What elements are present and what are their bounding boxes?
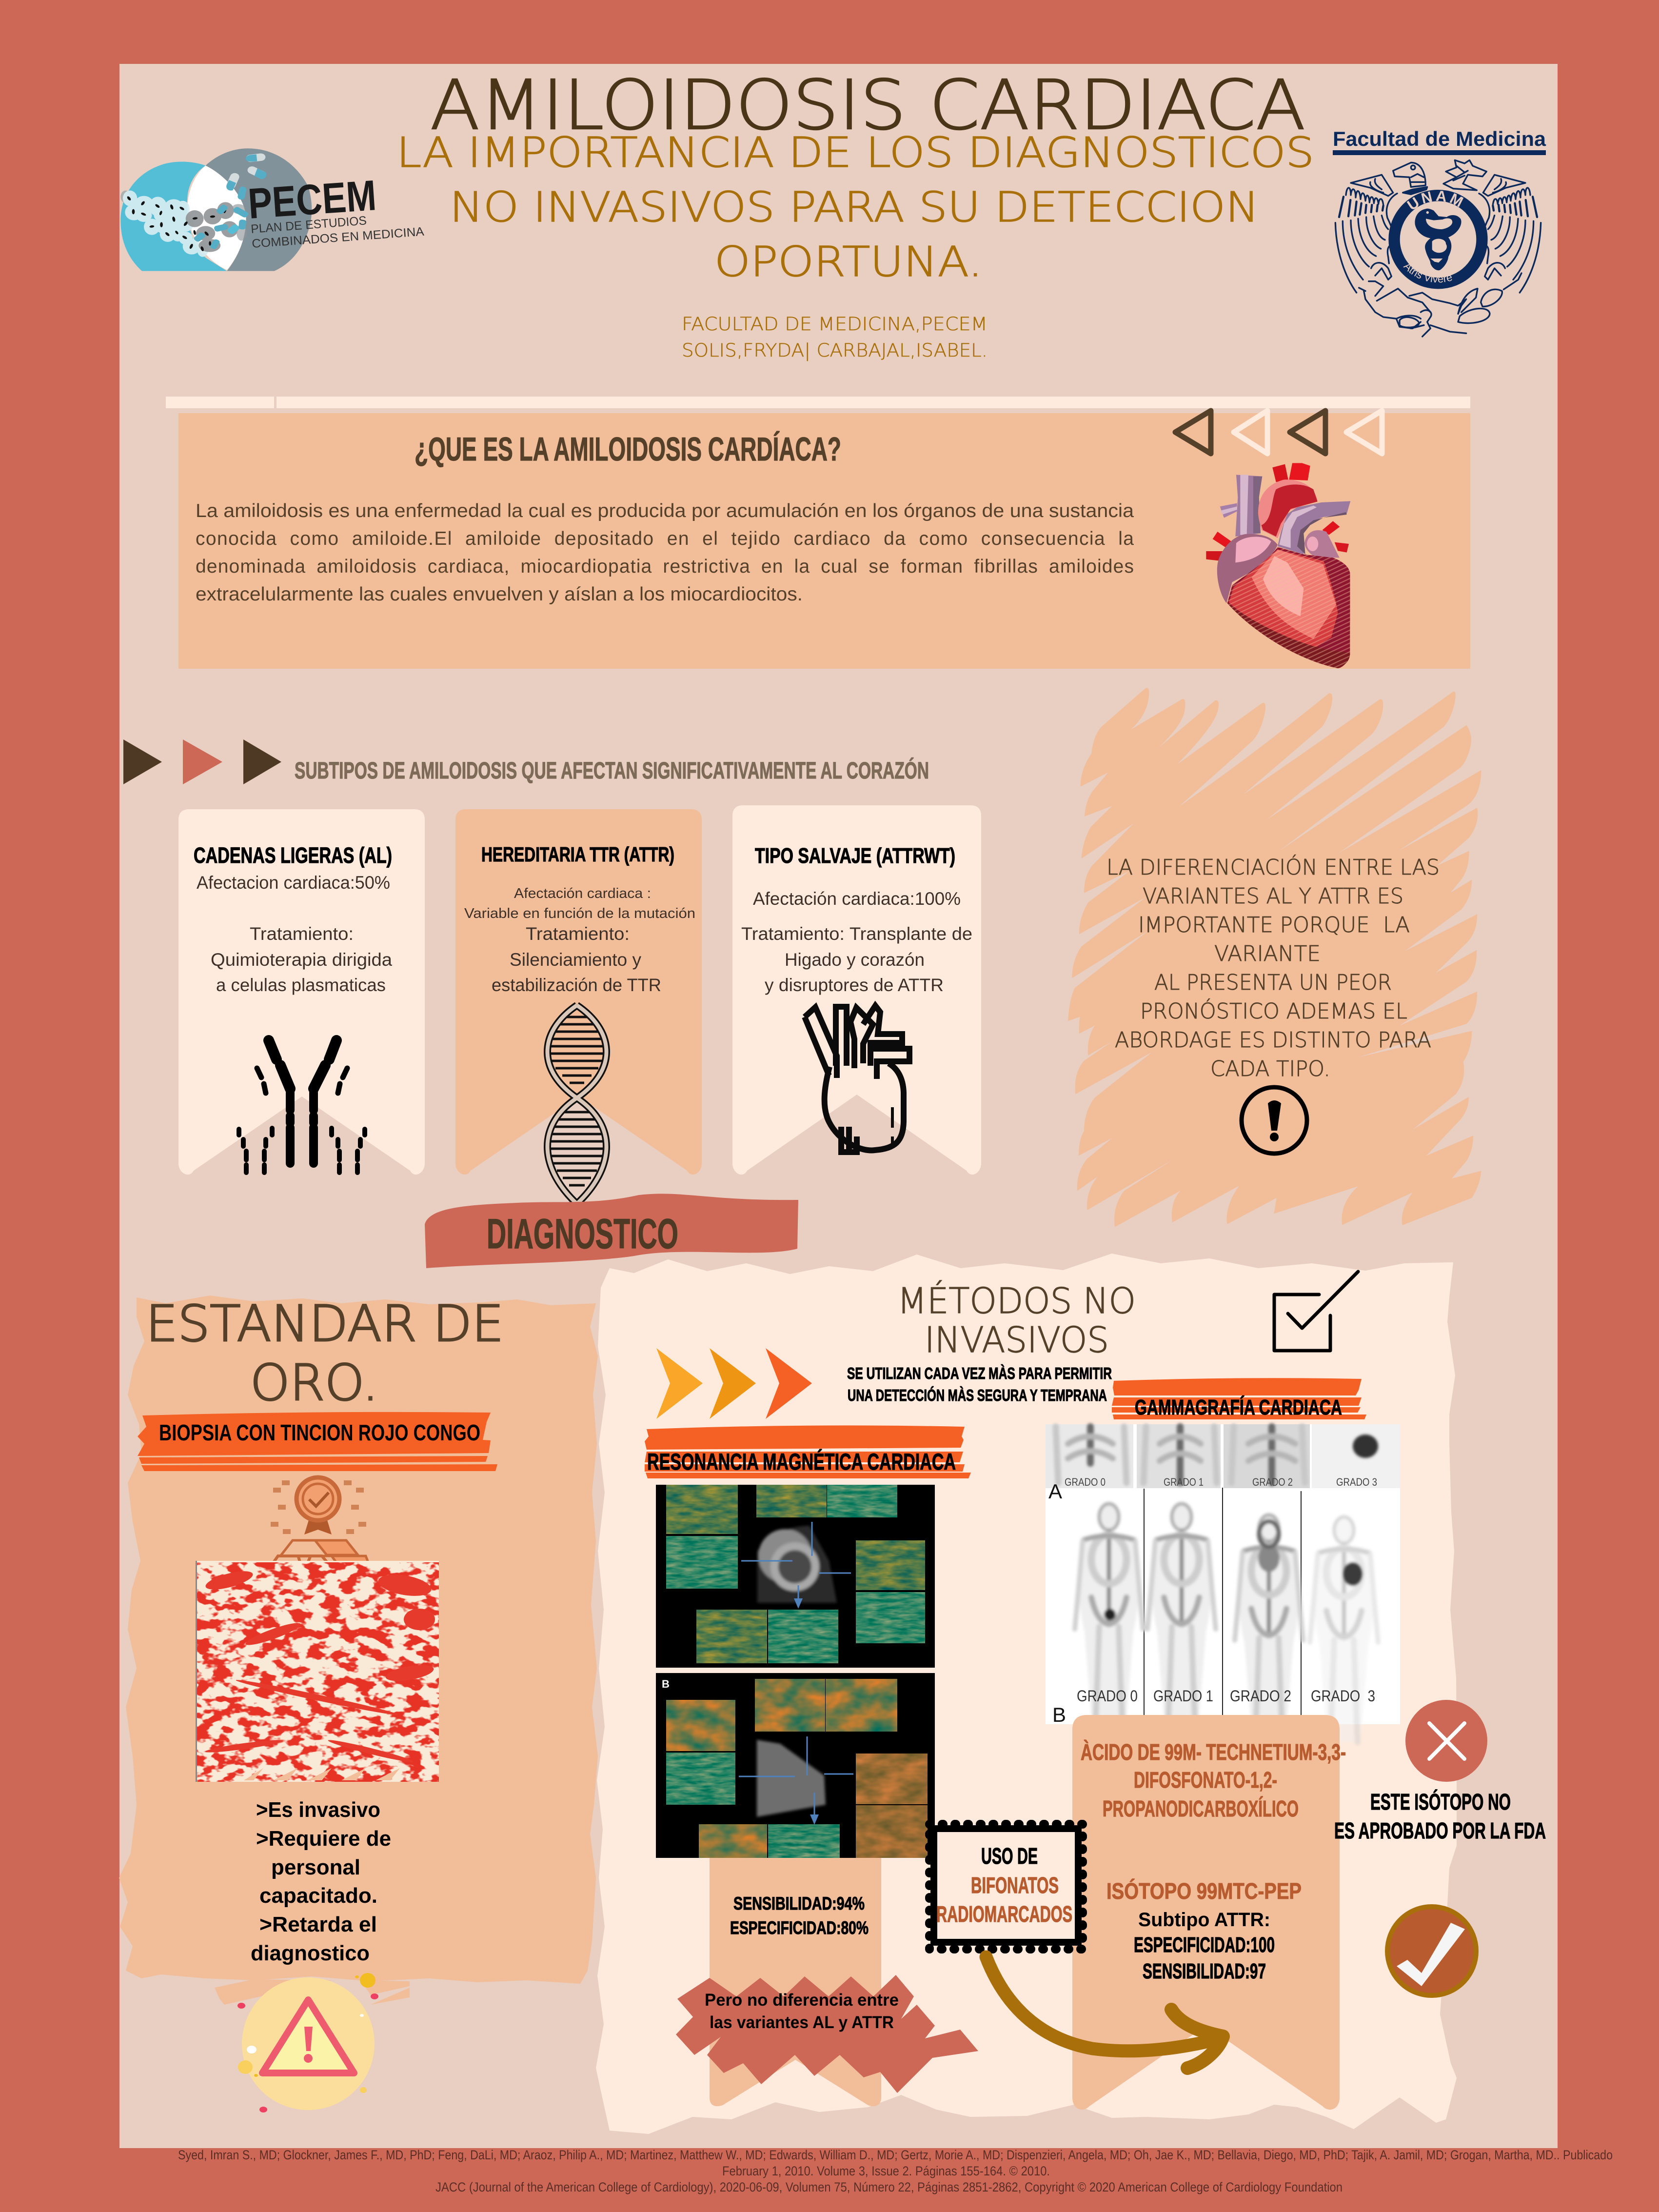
card text: a celulas plasmaticas	[216, 975, 386, 995]
card text: Quimioterapia dirigida	[211, 950, 392, 970]
text: desventajas biopsia: diagnostico	[251, 1941, 370, 1965]
text: metodos intro: SE UTILIZAN CADA VEZ MÀS PARA PERMITIR	[847, 1364, 1112, 1382]
crest	[1334, 159, 1542, 338]
banner: diagnostico	[425, 1194, 798, 1268]
icon: check circle	[1387, 1907, 1476, 1995]
brush label: gammagrafia	[1112, 1378, 1366, 1419]
scan labels A	[1048, 1476, 1377, 1503]
box: uso de bifonatos: BIFONATOS	[971, 1873, 1059, 1898]
note text: ABORDAGE ES DISTINTO PARA	[1115, 1028, 1431, 1053]
arrows: orange chevrons	[656, 1348, 812, 1419]
crest: Atris Vivere	[1403, 264, 1452, 283]
image: resonancia A	[656, 1485, 935, 1668]
image: congo red biopsy	[196, 1561, 439, 1782]
subtitle line 1: LA IMPORTANCIA DE LOS DIAGNOSTICOS	[396, 129, 1314, 177]
bookmark: isotopos	[1072, 1715, 1346, 2110]
image: gammagrafia	[1046, 1424, 1400, 1742]
brush label: biopsia: BIOPSIA CON TINCION ROJO CONGO	[159, 1420, 480, 1445]
scan labels A: GRADO 3	[1336, 1476, 1377, 1488]
chest scans	[1046, 1424, 1400, 1488]
icon: DNA helix	[545, 1005, 609, 1204]
bookmark: sensibilidad resonancia: ESPECIFICIDAD:80%	[730, 1918, 869, 1938]
scan labels A: A	[1048, 1480, 1062, 1503]
scan labels B: GRADO 3	[1311, 1687, 1375, 1705]
card text: Afectación cardiaca :	[514, 886, 651, 901]
box: uso de bifonatos: USO DE	[981, 1843, 1038, 1869]
brush label: biopsia	[138, 1412, 497, 1471]
card text: Silenciamiento y	[510, 950, 642, 970]
isotope name: ÀCIDO DE 99M- TECHNETIUM-3,3-	[1081, 1739, 1346, 1765]
references: JACC (Journal of the American College of Cardiology), 2020-06-09, Volumen 75, Número 22, Páginas 2851-2862, Copyright © 2020 American College of Cardiology Foundation	[435, 2180, 1343, 2194]
logo subtitle 1: PLAN DE ESTUDIOS	[250, 214, 367, 236]
panel: estandar de oro	[119, 1295, 598, 2005]
card text	[464, 886, 695, 995]
isotope name	[1081, 1739, 1346, 1904]
text: desventajas biopsia: personal	[271, 1855, 360, 1879]
card text: Variable en función de la mutación	[464, 906, 695, 921]
arrow 2	[183, 739, 222, 784]
heading: ¿QUE ES LA AMILOIDOSIS CARDÍACA?	[415, 431, 841, 468]
icon: medal and gold bars	[266, 1477, 373, 1574]
body text	[196, 500, 1134, 605]
heading line 2: ORO.	[250, 1354, 378, 1412]
panel: metodos no invasivos	[596, 1254, 1457, 2134]
panel: diferencia entre variantes (scribble)	[1068, 688, 1481, 1227]
scan labels B: B	[1052, 1703, 1066, 1726]
heading: metodos no invasivos: MÉTODOS NO	[897, 1280, 1136, 1321]
text: desventajas biopsia: >Es invasivo	[256, 1798, 380, 1822]
text: metodos intro	[847, 1364, 1112, 1404]
body text: denominada amiloidosis cardiaca, miocardiopatia restrictiva en la cual se forman fibrillas amiloides	[196, 556, 1134, 577]
card text: Tratamiento:	[250, 924, 354, 944]
logo wordmark: PECEM	[247, 171, 378, 228]
card title: TIPO SALVAJE (ATTRWT)	[755, 844, 955, 868]
subtype stats: Subtipo ATTR:	[1138, 1909, 1270, 1931]
decorative triangles	[1175, 411, 1382, 454]
note text: LA DIFERENCIACIÓN ENTRE LAS	[1106, 854, 1440, 880]
logo: PECEM	[120, 148, 425, 271]
image: resonancia B	[656, 1673, 935, 1858]
icon: exclamation	[1242, 1087, 1307, 1154]
brush note: no diferencia: las variantes AL y ATTR	[710, 2013, 894, 2032]
card text: Tratamiento:	[526, 924, 630, 944]
scan labels B: GRADO 1	[1153, 1687, 1213, 1705]
text: desventajas biopsia: capacitado.	[259, 1884, 377, 1908]
scan labels B: GRADO 0	[1077, 1687, 1138, 1705]
heading: metodos no invasivos	[897, 1280, 1136, 1360]
card text: Afectación cardiaca:100%	[753, 889, 961, 909]
card text: estabilización de TTR	[492, 975, 661, 995]
card: tipo salvaje	[732, 805, 981, 1175]
scan labels A: GRADO 2	[1252, 1476, 1293, 1488]
card text: y disruptores de ATTR	[765, 975, 944, 995]
card text: Afectacion cardiaca:50%	[197, 873, 390, 893]
text: desventajas biopsia: >Requiere de	[256, 1827, 391, 1851]
isotope name: PROPANODICARBOXÍLICO	[1103, 1796, 1299, 1821]
panel: que es la amiloidosis	[178, 413, 1470, 669]
icon: warning	[237, 1973, 378, 2112]
bookmark: sensibilidad resonancia	[710, 1844, 881, 2106]
body text: conocida como amiloide.El amiloide depositado en el tejido cardiaco da como consecuencia la	[196, 528, 1134, 549]
subtitle line 2: NO INVASIVOS PARA SU DETECCION	[450, 183, 1259, 232]
text: desventajas biopsia	[251, 1798, 391, 1965]
note: no aprobado FDA	[1334, 1789, 1546, 1843]
subtype stats: ESPECIFICIDAD:100	[1134, 1933, 1275, 1957]
text: desventajas biopsia: >Retarda el	[259, 1913, 377, 1936]
subtitle line 3: OPORTUNA.	[714, 238, 983, 286]
references: February 1, 2010. Volume 3, Issue 2. Páginas 155-164. © 2010.	[722, 2164, 1050, 2178]
subtype stats	[1134, 1909, 1275, 1983]
banner text: DIAGNOSTICO	[487, 1211, 678, 1257]
note text: VARIANTE	[1214, 941, 1321, 966]
section header: subtipos	[123, 739, 929, 784]
note text: CADA TIPO.	[1210, 1056, 1330, 1081]
whole-body scans	[1075, 1504, 1378, 1742]
heading: ESTANDAR DE	[146, 1295, 504, 1353]
note text: AL PRESENTA UN PEOR	[1154, 970, 1392, 995]
scan labels A: GRADO 0	[1065, 1476, 1106, 1488]
note: no aprobado FDA: ES APROBADO POR LA FDA	[1334, 1818, 1546, 1843]
title: AMILOIDOSIS CARDIACA	[430, 66, 1305, 145]
isotope name: ISÓTOPO 99MTC-PEP	[1106, 1878, 1302, 1904]
card title: HEREDITARIA TTR (ATTR)	[481, 843, 674, 866]
card: cadenas ligeras	[178, 809, 425, 1175]
section heading: SUBTIPOS DE AMILOIDOSIS QUE AFECTAN SIGNIFICATIVAMENTE AL CORAZÓN	[295, 757, 929, 784]
card text	[741, 889, 972, 995]
logo title: Facultad de Medicina	[1333, 127, 1546, 150]
scan labels A: GRADO 1	[1164, 1476, 1204, 1488]
scan labels B: GRADO 2	[1230, 1687, 1291, 1705]
icon: anatomical heart	[1206, 463, 1350, 668]
card text: Higado y corazón	[785, 950, 925, 970]
icon: heart outline	[805, 1006, 909, 1152]
arrow: bifonatos to isotope	[986, 1957, 1223, 2068]
card text: Tratamiento: Transplante de	[741, 924, 972, 944]
references	[178, 2148, 1613, 2194]
brush label: resonancia	[645, 1425, 971, 1478]
note text: IMPORTANTE PORQUE LA	[1138, 913, 1410, 937]
band: top cream strip	[166, 397, 1470, 408]
note text	[1106, 854, 1440, 1081]
box: uso de bifonatos: RADIOMARCADOS	[936, 1901, 1072, 1927]
logo subtitle 2: COMBINADOS EN MEDICINA	[251, 225, 425, 251]
subtype stats: SENSIBILIDAD:97	[1143, 1959, 1266, 1983]
scan labels B	[1052, 1687, 1375, 1726]
card title: CADENAS LIGERAS (AL)	[194, 843, 392, 868]
brush label: resonancia: RESONANCIA MAGNÉTICA CARDIACA	[647, 1449, 956, 1475]
body text: extracelularmente las cuales envuelven y aíslan a los miocardiocitos.	[196, 584, 803, 605]
isotope name: DIFOSFONATO-1,2-	[1134, 1767, 1277, 1793]
box: uso de bifonatos	[929, 1824, 1083, 1949]
affiliation: FACULTAD DE MEDICINA,PECEM	[682, 314, 988, 335]
icon: checkbox	[1274, 1272, 1358, 1351]
header: title block	[396, 66, 1314, 361]
image: resonancia B: B	[662, 1678, 670, 1690]
arrow 3	[243, 739, 281, 784]
body text: La amiloidosis es una enfermedad la cual es producida por acumulación en los órganos de una sustancia	[196, 500, 1134, 521]
brush note: no diferencia: Pero no diferencia entre	[705, 1991, 899, 2010]
text: metodos intro: UNA DETECCIÓN MÀS SEGURA Y TEMPRANA	[848, 1386, 1107, 1404]
card text	[197, 873, 392, 995]
brush note: no diferencia	[676, 1975, 978, 2093]
brush label: gammagrafia: GAMMAGRAFÍA CARDIACA	[1135, 1395, 1342, 1419]
card: hereditaria	[455, 809, 702, 1204]
note text: PRONÓSTICO ADEMAS EL	[1140, 998, 1407, 1024]
icon: X circle	[1405, 1700, 1487, 1782]
note text: VARIANTES AL Y ATTR ES	[1143, 884, 1403, 909]
crest: UNAM	[1406, 191, 1464, 209]
logo: Facultad de Medicina	[1333, 127, 1546, 338]
authors: SOLIS,FRYDA| CARBAJAL,ISABEL.	[682, 340, 988, 361]
heading: metodos no invasivos: INVASIVOS	[925, 1319, 1109, 1360]
icon: antibody	[239, 1040, 365, 1173]
stats: SENSIBILIDAD:94%	[733, 1893, 865, 1913]
note: no aprobado FDA: ESTE ISÓTOPO NO	[1370, 1789, 1511, 1814]
arrow 1	[123, 739, 162, 784]
